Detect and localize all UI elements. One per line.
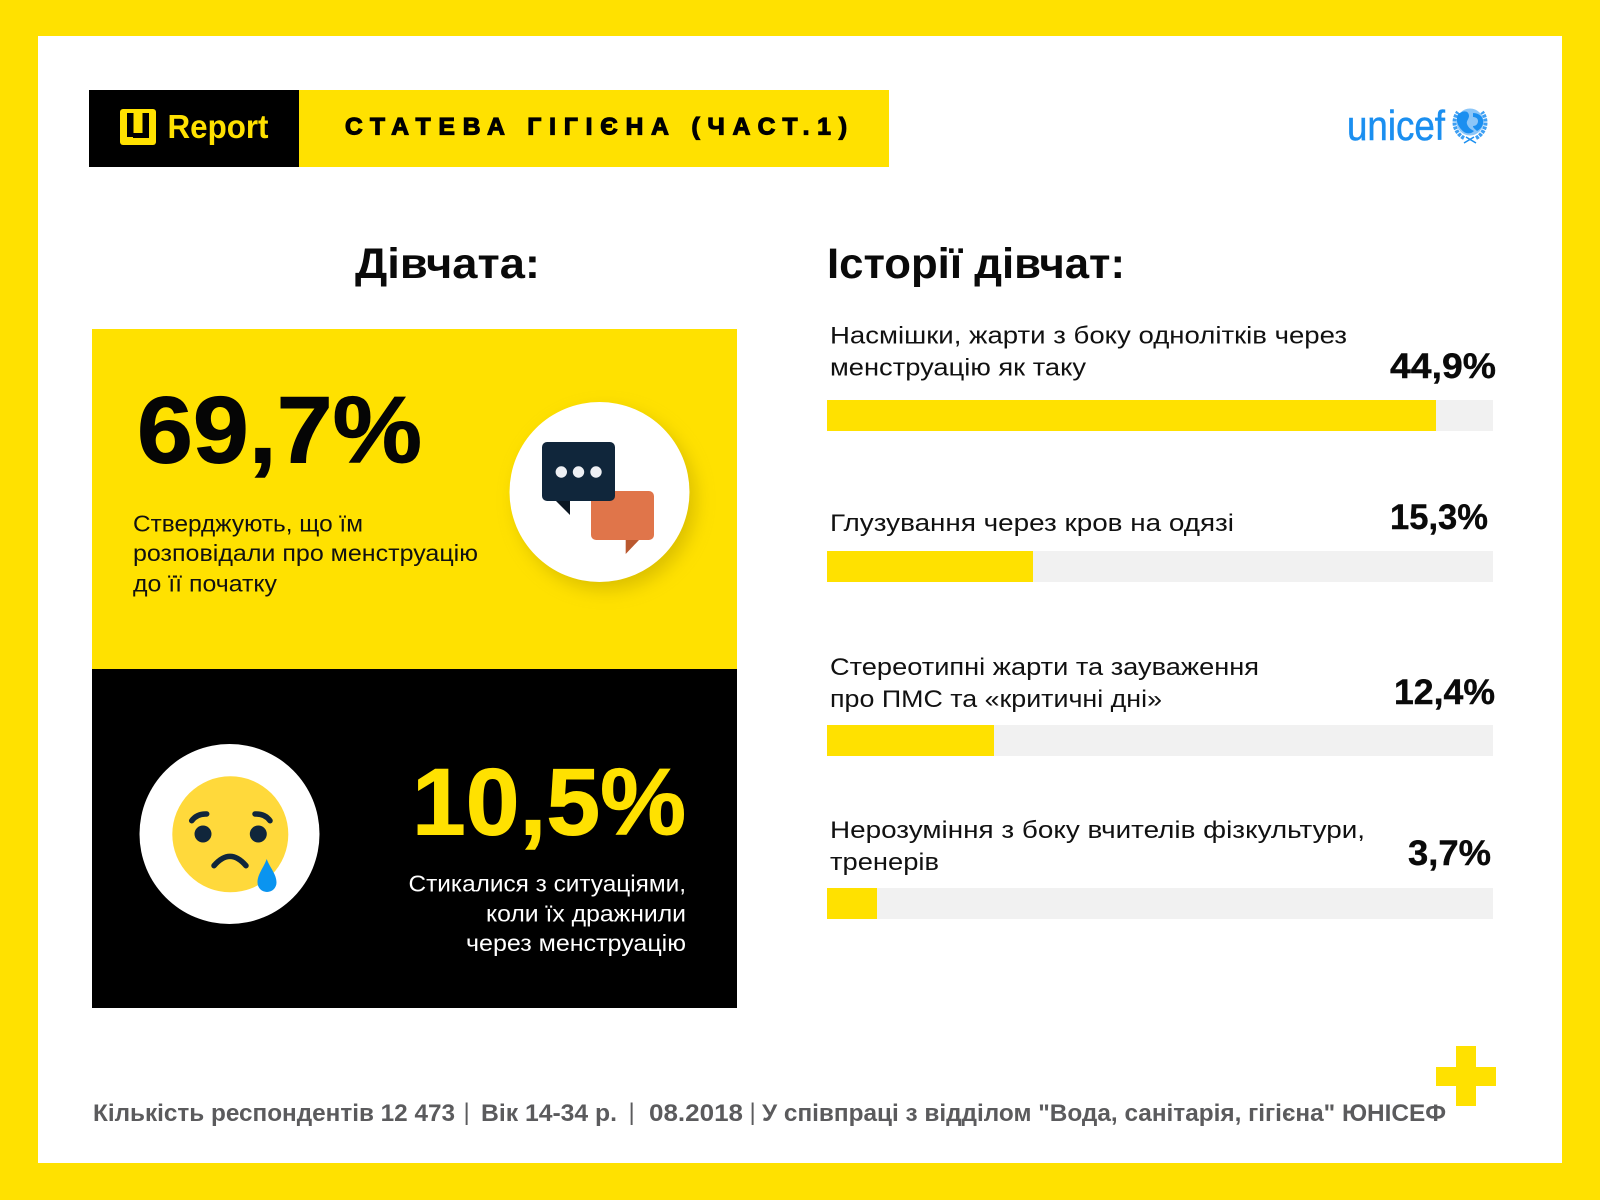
banner title	[299, 90, 889, 167]
description	[408, 870, 686, 956]
description: через менструацію	[466, 930, 686, 956]
chart row: peer jokes 44,9%	[827, 322, 1496, 431]
chart row: blood on clothes 15,3%	[827, 498, 1493, 582]
description	[133, 510, 478, 596]
chart row: peer jokes 44,9%: Насмішки, жарти з боку однолітків через	[830, 322, 1347, 350]
U-Report logo: Report	[168, 108, 268, 145]
footer note	[93, 1099, 1446, 1127]
description: до її початку	[133, 570, 278, 596]
banner title: СТАТЕВА ГІГІЄНА (ЧАСТ.1)	[345, 114, 847, 140]
icon: chat bubbles	[510, 402, 696, 590]
stat 69,7%: 69,7%	[137, 378, 422, 484]
chart row: PE teachers 3,7%: 3,7%	[1408, 834, 1491, 873]
chart row: PE teachers 3,7%: Нерозуміння з боку вчителів фізкультури,	[830, 817, 1365, 844]
footer note: |	[628, 1099, 635, 1126]
panel: told about menstruation	[92, 329, 737, 669]
heading: girls: Дівчата:	[355, 240, 540, 288]
chart row: PMS jokes 12,4%	[827, 654, 1495, 756]
chart row: PMS jokes 12,4%: про ПМС та «критичні дні»	[830, 686, 1162, 713]
footer note: Кількість респондентів 12 473	[93, 1100, 455, 1127]
panel: teased about menstruation	[92, 669, 737, 1008]
U-Report logo	[89, 90, 299, 167]
footer note: У співпраці з відділом "Вода, санітарія, гігієна" ЮНІСЕФ	[762, 1100, 1446, 1127]
footer note: |	[464, 1099, 470, 1126]
description: розповідали про менструацію	[133, 540, 478, 566]
chart row: PE teachers 3,7%	[827, 817, 1493, 919]
description: коли їх дражнили	[486, 900, 686, 926]
chart row: PE teachers 3,7%: тренерів	[830, 849, 939, 876]
description: Стикалися з ситуаціями,	[408, 870, 686, 896]
footer note: Вік 14-34 р.	[481, 1100, 617, 1127]
footer note: 08.2018	[649, 1100, 743, 1127]
chart row: blood on clothes 15,3%: 15,3%	[1390, 498, 1488, 537]
icon: yellow plus	[1436, 1046, 1496, 1106]
icon: crying face	[140, 744, 320, 924]
chart row: peer jokes 44,9%: 44,9%	[1390, 347, 1496, 386]
stat 10,5%: 10,5%	[412, 750, 686, 856]
footer note: |	[750, 1099, 756, 1126]
unicef logo: unicef	[1347, 102, 1445, 149]
chart row: peer jokes 44,9%: менструацію як таку	[830, 354, 1087, 382]
description: Стверджують, що їм	[133, 510, 363, 536]
chart row: PMS jokes 12,4%: Стереотипні жарти та зауваження	[830, 654, 1259, 681]
header banner	[89, 90, 889, 167]
heading: girls' stories: Історії дівчат:	[827, 240, 1125, 288]
chart row: blood on clothes 15,3%: Глузування через кров на одязі	[830, 510, 1234, 537]
chart row: PMS jokes 12,4%: 12,4%	[1394, 673, 1495, 712]
